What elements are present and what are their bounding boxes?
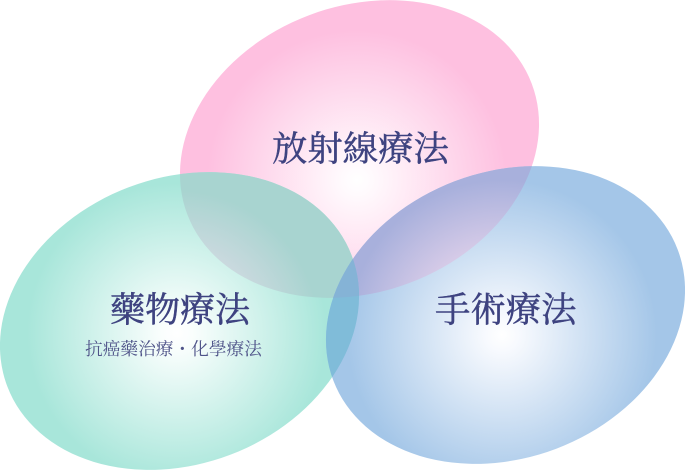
- pink ellipse: radiation therapy: [180, 0, 539, 298]
- overlap: pink and green: [180, 172, 353, 298]
- overlap: all three: [333, 260, 359, 298]
- label: chemotherapy subtitle: 抗癌藥治療・化學療法: [85, 339, 262, 359]
- overlap: pink and blue: [353, 166, 532, 296]
- blue ellipse: surgery: [326, 166, 685, 464]
- overlap: green and blue: [326, 259, 359, 377]
- label: drug therapy: 藥物療法: [110, 291, 251, 330]
- label: surgery: 手術療法: [435, 290, 577, 330]
- label: radiation therapy: 放射線療法: [272, 129, 450, 169]
- green ellipse: drug therapy: [0, 172, 359, 470]
